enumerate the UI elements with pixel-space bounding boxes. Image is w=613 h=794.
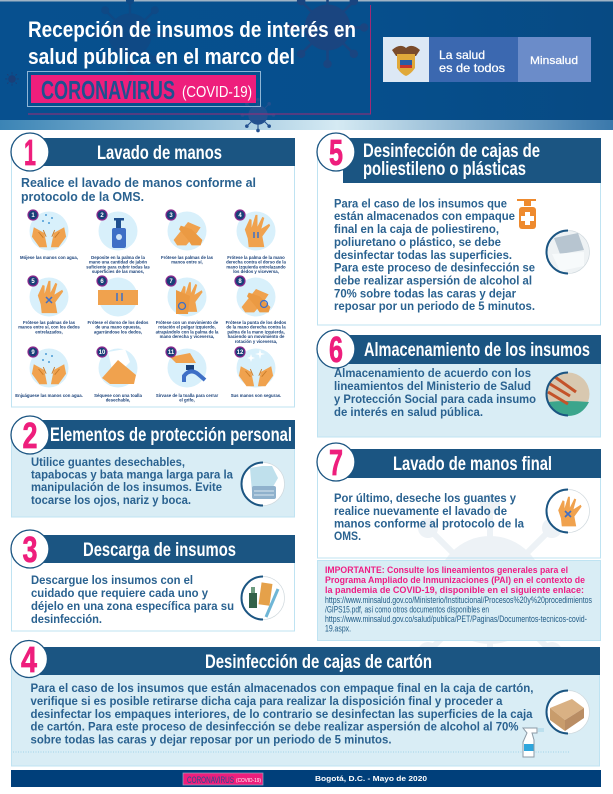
number badge: [11, 529, 49, 570]
body text: cuidado que requiere cada uno y: [31, 588, 209, 600]
panel 4: desinfección de cajas de cartón: [10, 639, 600, 766]
intro text: protocolo de la OMS.: [21, 190, 144, 204]
icon: gloves and mask: [242, 462, 284, 506]
footer: [11, 770, 601, 787]
step 7: atrapándolo con la palma de la: [156, 329, 219, 334]
icon: polystyrene box: [546, 230, 590, 274]
intro text: Realice el lavado de manos conforme al: [21, 176, 256, 190]
number badge: 3: [22, 529, 38, 570]
number badge: 5: [329, 132, 343, 173]
body text: sobre todas las caras y dejar reposar por un periodo de 5 minutos.: [30, 734, 392, 746]
step 9: [15, 347, 83, 398]
number badge: 6: [329, 329, 343, 370]
heading: poliestileno o plásticas: [363, 159, 526, 180]
panel 7: lavado de manos final: [317, 442, 601, 558]
coronavirus label: CORONAVIRUS: [41, 75, 175, 105]
step 6: agarrándose los dedos,: [94, 329, 142, 334]
intro text: [21, 176, 256, 204]
logo: La salud es de todos, Minsalud: [383, 37, 591, 82]
step 9: 9: [31, 350, 35, 356]
step 12: 12: [237, 350, 244, 356]
step 10: desechable,: [106, 398, 130, 403]
logo: La salud es de todos, Minsalud: es de todos: [439, 61, 505, 75]
body text: tocarse los ojos, nariz y boca.: [31, 495, 191, 507]
panel 6: almacenamiento de los insumos: [317, 329, 601, 437]
body text: [31, 575, 234, 626]
step 3: 3: [169, 213, 173, 219]
step 12: [231, 347, 281, 398]
step 6: 6: [100, 279, 104, 285]
step 3: Frótese las palmas de las: [161, 255, 214, 260]
heading: Elementos de protección personal: [50, 425, 292, 446]
title: Recepción de insumos de interés en: [28, 17, 356, 42]
important heading text: IMPORTANTE: Consulte los lineamientos generales para el: [325, 565, 568, 576]
body text: de cartón. Para este proceso de desinfección se debe realizar aspersión de alcohol al 70%: [30, 722, 518, 734]
body text: realice nuevamente el lavado de: [334, 506, 507, 518]
important heading text: la pandemia de COVID-19, disponible en el siguiente enlace:: [325, 585, 584, 596]
body text: Utilice guantes desechables,: [31, 457, 185, 469]
body text: de interés en salud pública.: [334, 407, 483, 419]
step 12: Sus manos son seguras.: [231, 393, 281, 398]
body text: [334, 493, 525, 543]
step 8: Frótese la punta de los dedos: [226, 320, 287, 325]
step 8: palma de la mano izquierda,: [227, 329, 285, 334]
step 8: de la mano derecha contra la: [226, 325, 286, 330]
icon: hand: [546, 490, 590, 532]
step 8: 8: [238, 279, 242, 285]
step 8: rotación y viceversa,: [235, 339, 277, 344]
step 3: manos entre sí,: [171, 260, 203, 265]
body text: y Protección Social para cada insumo: [334, 394, 536, 406]
number badge: [10, 639, 48, 680]
body text: reposar por un periodo de 5 minutos.: [334, 301, 535, 313]
heading: Desinfección de cajas de cartón: [205, 652, 432, 673]
header banner: [0, 0, 613, 132]
links text: 19.aspx.: [325, 624, 351, 634]
body text: [31, 457, 234, 507]
body text: poliuretano o plástico, se debe: [334, 237, 501, 249]
heading: Desinfección de cajas de: [363, 141, 540, 162]
panel 5: desinfección de cajas de poliestileno o plásticas: [317, 132, 601, 325]
step 2: Deposite en la palma de la: [91, 255, 145, 260]
step 9: Enjuáguese las manos con agua.: [15, 393, 83, 398]
body text: lineamientos del Ministerio de Salud: [334, 381, 531, 393]
step 8: haciendo un movimiento de: [228, 334, 285, 339]
body text: OMS.: [334, 531, 361, 543]
decorative frame line: [28, 5, 370, 114]
step 11: Sírvase de la toalla para cerrar: [156, 393, 218, 398]
body text: Para este proceso de desinfección se: [334, 262, 535, 274]
links text: /GIPS15.pdf, así como otros documentos disponibles en: [325, 604, 489, 616]
body text: [334, 368, 536, 419]
step 10: [94, 347, 142, 403]
body text: desinfección.: [31, 614, 102, 626]
body text: [334, 198, 535, 313]
step 2: superficies de las manos,: [92, 269, 144, 274]
number badge: [317, 329, 355, 370]
body text: Almacenamiento de acuerdo con los: [334, 368, 531, 380]
step 7: Frótese con un movimiento de: [156, 320, 219, 325]
step 1: 1: [31, 213, 35, 219]
step 7: rotación el pulgar izquierdo,: [158, 325, 216, 330]
heading: Lavado de manos: [97, 143, 222, 164]
step 4: los dedos y viceversa,: [233, 269, 279, 274]
number badge: [11, 415, 49, 456]
body text: manos conforme al protocolo de la: [334, 518, 525, 530]
body text: Para el caso de los insumos que: [334, 198, 507, 210]
panel 1: lavado de manos: [11, 132, 295, 407]
step 5: manos entre sí, con los dedos: [18, 325, 80, 330]
body text: manipulación de los insumos. Evite: [31, 482, 222, 494]
coronavirus label: (COVID-19): [182, 84, 252, 101]
footer coronavirus label: CORONAVIRUS: [187, 775, 234, 785]
body text: están almacenados con empaque: [334, 211, 515, 223]
step 1: Mójese las manos con agua,: [20, 255, 78, 260]
panel 2: elementos de protección personal: [11, 415, 295, 517]
step 6: [88, 276, 149, 334]
step 11: 11: [168, 350, 175, 356]
panel: importante: [318, 560, 600, 640]
step 7: mano derecha y viceversa,: [160, 334, 214, 339]
links text: [325, 595, 592, 634]
step 11: el grifo,: [179, 398, 195, 403]
number badge: [317, 132, 355, 173]
step 2: 2: [100, 213, 104, 219]
step 7: [156, 276, 219, 339]
step 5: [18, 276, 80, 334]
step 4: mano izquierda entrelazando: [226, 264, 286, 269]
body text: desinfectar los empaques interiores, de lo contrario se desinfectan las superficies de la caja: [30, 709, 533, 721]
icon: coat of arms: [392, 46, 420, 76]
step 2: [86, 210, 150, 274]
background virus watermark: [394, 494, 586, 686]
step 10: Séquese con una toalla: [94, 393, 142, 398]
title: salud pública en el marco del: [28, 44, 295, 69]
logo: La salud es de todos, Minsalud: La salud: [439, 48, 485, 62]
icon: cardboard box: [546, 690, 590, 734]
date: Bogotá, D.C. - Mayo de 2020: [315, 774, 427, 783]
title: [28, 17, 356, 69]
icon: medicines: [242, 576, 284, 620]
step 4: [226, 210, 286, 274]
body text: debe realizar aspersión de alcohol al: [334, 276, 532, 288]
footer coronavirus label: (COVID-19): [236, 778, 261, 784]
step 2: suficiente para cubrir todas las: [86, 264, 150, 269]
step 6: de una mano opuesta,: [95, 325, 141, 330]
number badge: 4: [21, 639, 37, 680]
heading: Descarga de insumos: [83, 540, 236, 561]
step 5: Frótese las palmas de las: [23, 320, 76, 325]
step 4: derecha contra el dorso de la: [226, 260, 286, 265]
body text: desinfectar todas las superficies.: [334, 250, 512, 262]
step 4: 4: [238, 213, 242, 219]
body text: 70% sobre todas las caras y dejar: [334, 288, 517, 300]
important heading text: [325, 565, 585, 596]
number badge: [11, 132, 49, 173]
step 6: Frótese el dorso de los dedos: [88, 320, 149, 325]
number badge: 2: [22, 415, 38, 456]
step 11: [156, 347, 218, 403]
logo: La salud es de todos, Minsalud: Minsalud: [530, 55, 578, 67]
step 1: [20, 210, 78, 260]
body text: verifique si es posible retirarse dicha caja para realizar la disposición final y proceder a: [30, 696, 503, 708]
body text: Descargue los insumos con el: [31, 575, 193, 587]
number badge: 1: [24, 132, 36, 173]
step 5: entrelazados,: [35, 329, 63, 334]
heading: [363, 141, 540, 180]
icon: sanitizer bottle: [517, 199, 536, 229]
step 4: Frótese la palma de la mano: [227, 255, 285, 260]
step 2: mano una cantidad de jabón: [89, 260, 147, 265]
step 5: 5: [31, 279, 35, 285]
step 8: [226, 276, 287, 344]
footer coronavirus label: [183, 773, 263, 785]
step 7: 7: [169, 279, 173, 285]
body text: Para el caso de los insumos que están almacenados con empaque final en la caja de cartón,: [30, 683, 534, 695]
body text: Por último, deseche los guantes y: [334, 493, 517, 505]
step 10: 10: [99, 350, 106, 356]
important heading text: Programa Ampliado de Inmunizaciones (PAI) en el contexto de: [325, 575, 585, 586]
panel 3: descarga de insumos: [11, 529, 295, 631]
body text: final en la caja de poliestireno,: [334, 224, 499, 236]
body text: déjelo en una zona específica para su: [31, 601, 234, 613]
icon: spray bottle: [523, 728, 544, 757]
step 3: [161, 210, 214, 265]
body text: tapabocas y bata manga larga para la: [31, 470, 234, 482]
number badge: [317, 442, 355, 483]
icon: warehouse: [546, 372, 590, 416]
heading: Lavado de manos final: [393, 454, 552, 475]
body text: [30, 683, 534, 746]
number badge: 7: [329, 442, 343, 483]
